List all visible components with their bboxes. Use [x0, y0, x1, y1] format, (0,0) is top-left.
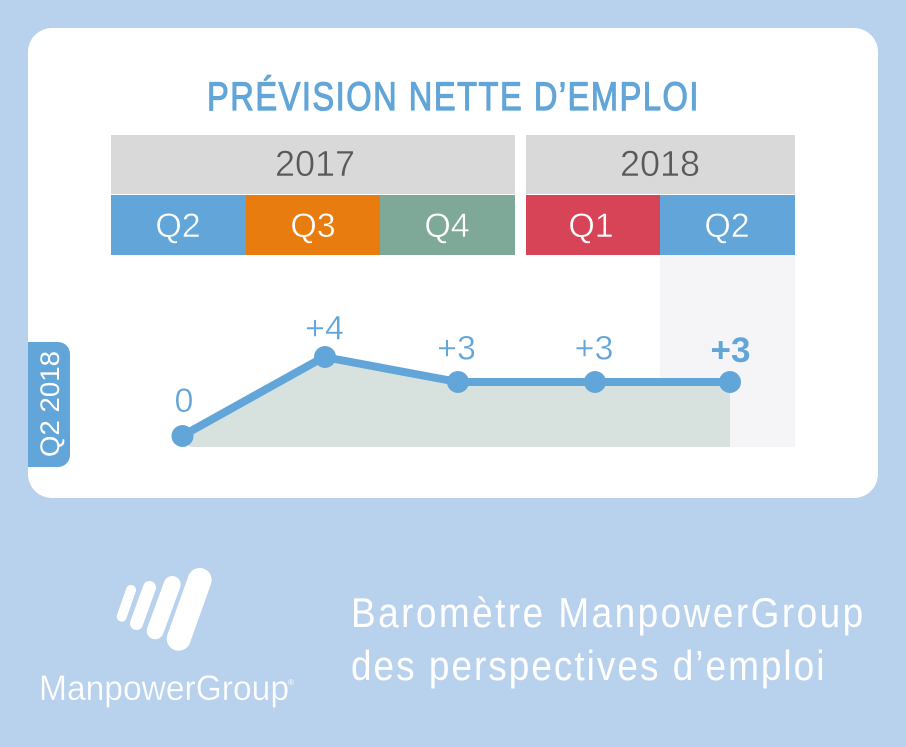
quarter Q2 2017: Q2: [155, 207, 201, 245]
table header: years and quarters: [111, 135, 795, 255]
logo: ManpowerGroup: [39, 580, 294, 708]
tagline: Baromètre ManpowerGroup: [351, 590, 863, 637]
tab: Q2 2018: [28, 342, 70, 467]
quarter Q3 2017: [246, 195, 380, 255]
year 2017: [111, 135, 515, 194]
quarter Q1 2018: [526, 195, 660, 255]
icon: logo bars: [122, 580, 200, 639]
data labels: +3: [575, 330, 613, 368]
quarter Q3 2017: Q3: [290, 207, 336, 245]
title: PRÉVISION NETTE D’EMPLOI: [207, 74, 698, 119]
quarter Q2 2017: [111, 195, 246, 255]
highlighted current quarter column: [660, 255, 795, 447]
trend line: [182, 357, 730, 436]
year 2018: 2018: [620, 143, 700, 184]
line chart: [172, 310, 750, 447]
quarter Q2 2018: Q2: [704, 207, 750, 245]
data points: [172, 346, 741, 447]
quarter Q4 2017: [380, 195, 515, 255]
data labels: +3: [437, 330, 476, 368]
quarter Q2 2018: [660, 195, 795, 255]
quarter Q4 2017: Q4: [424, 207, 470, 245]
data labels: 0: [175, 382, 193, 420]
tagline: [351, 590, 863, 690]
year 2017: 2017: [275, 143, 355, 184]
registered mark: ®: [288, 678, 294, 687]
quarter Q1 2018: Q1: [568, 207, 614, 245]
data labels: +3: [711, 331, 750, 370]
panel: white card: [28, 28, 878, 498]
tab: Q2 2018: Q2 2018: [35, 351, 65, 457]
logo wordmark: ManpowerGroup: [39, 669, 289, 708]
tagline: des perspectives d’emploi: [351, 643, 824, 690]
data labels: [175, 310, 750, 420]
year 2018: [526, 135, 795, 194]
data labels: +4: [305, 310, 344, 348]
area under the line: [182, 357, 730, 447]
